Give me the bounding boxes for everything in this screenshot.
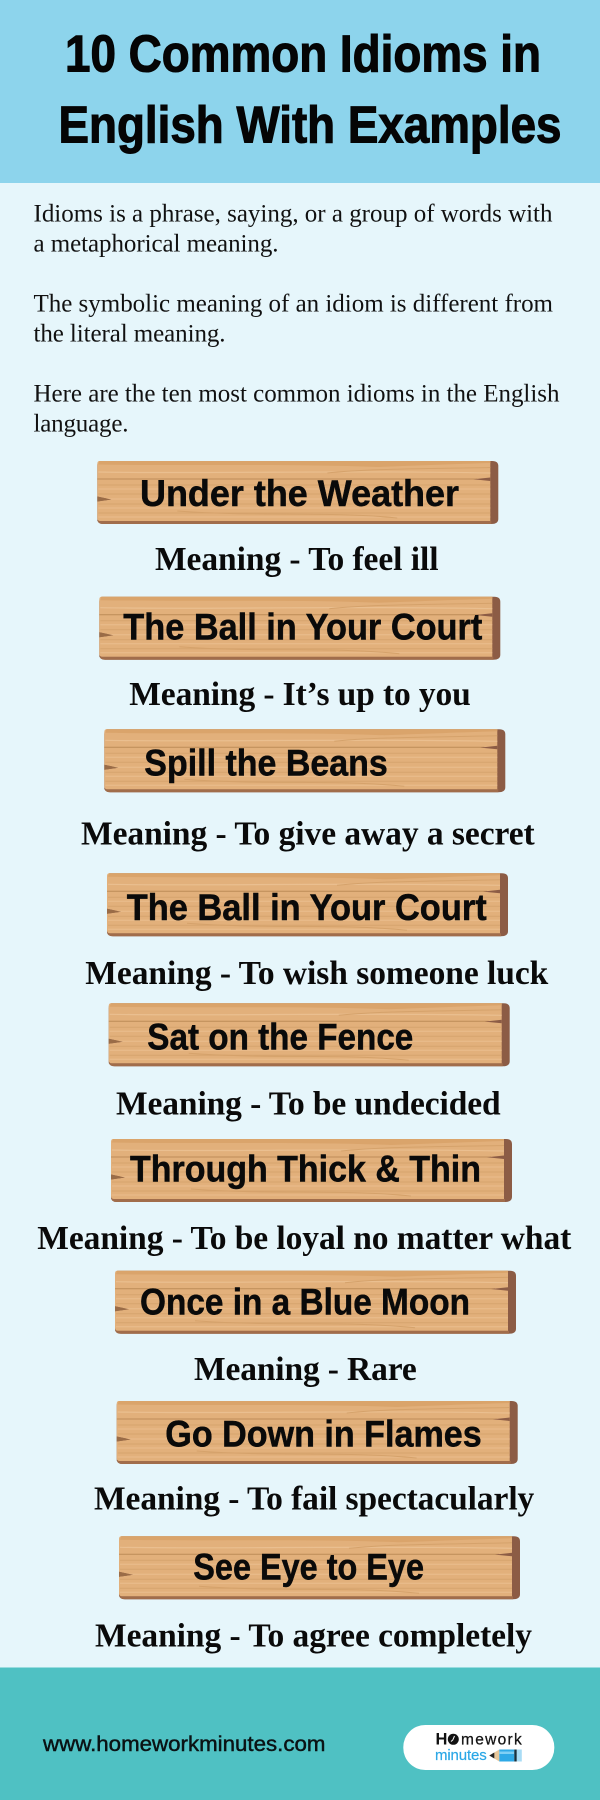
plank: Go Down in Flames [117, 1401, 518, 1464]
plank: Go Down in Flames: Go Down in Flames [165, 1413, 482, 1455]
intro text [34, 200, 560, 438]
plank: Sat on the Fence: Sat on the Fence [147, 1015, 413, 1057]
intro text: The symbolic meaning of an idiom is different from [34, 290, 554, 318]
meaning: It's up to you: Meaning - It’s up to you [129, 676, 471, 713]
plank: The Ball in Your Court [99, 597, 500, 660]
plank: See Eye to Eye [119, 1536, 520, 1599]
meaning: To be undecided: Meaning - To be undecided [116, 1085, 501, 1122]
plank: Once in a Blue Moon: Once in a Blue Moon [140, 1281, 470, 1323]
meaning: To give away a secret: Meaning - To give away a secret [81, 815, 536, 852]
plank: Through Thick & Thin [111, 1139, 512, 1202]
meaning: To be loyal no matter what: Meaning - To be loyal no matter what [37, 1220, 572, 1257]
plank: Through Thick & Thin: Through Thick & Thin [130, 1148, 481, 1190]
logo: Homework Minutes [403, 1725, 554, 1770]
intro text: Idioms is a phrase, saying, or a group of words with [34, 200, 553, 228]
title [58, 26, 562, 154]
plank: The Ball in Your Court, second: The Ball in Your Court [127, 886, 487, 928]
plank: Sat on the Fence [109, 1003, 510, 1066]
website url: www.homeworkminutes.com [42, 1733, 325, 1756]
plank: The Ball in Your Court, second [107, 873, 508, 936]
logo: Homework Minutes: mework [461, 1731, 522, 1748]
meaning: Rare: Meaning - Rare [194, 1351, 417, 1388]
plank: Under the Weather: Under the Weather [140, 472, 459, 514]
plank: See Eye to Eye: See Eye to Eye [193, 1545, 424, 1587]
intro text: Here are the ten most common idioms in the English [34, 380, 560, 408]
plank: Once in a Blue Moon [115, 1271, 516, 1334]
title: 10 Common Idioms in [65, 26, 541, 84]
footer band [0, 1668, 600, 1800]
plank: The Ball in Your Court: The Ball in Your Court [123, 605, 483, 647]
logo: Homework Minutes: H [436, 1730, 447, 1748]
logo: Homework Minutes: minutes [435, 1747, 487, 1764]
meaning: To agree completely: Meaning - To agree completely [95, 1618, 532, 1655]
meaning: To wish someone luck: Meaning - To wish someone luck [85, 955, 549, 992]
intro text: language. [34, 410, 128, 438]
plank: Under the Weather [97, 461, 498, 524]
intro text: a metaphorical meaning. [34, 230, 278, 258]
intro text: the literal meaning. [34, 320, 226, 348]
plank: Spill the Beans [104, 729, 505, 792]
header band [0, 0, 600, 183]
meaning: To feel ill: Meaning - To feel ill [155, 541, 438, 578]
plank: Spill the Beans: Spill the Beans [144, 741, 388, 783]
meaning: To fail spectacularly: Meaning - To fail spectacularly [94, 1480, 535, 1517]
